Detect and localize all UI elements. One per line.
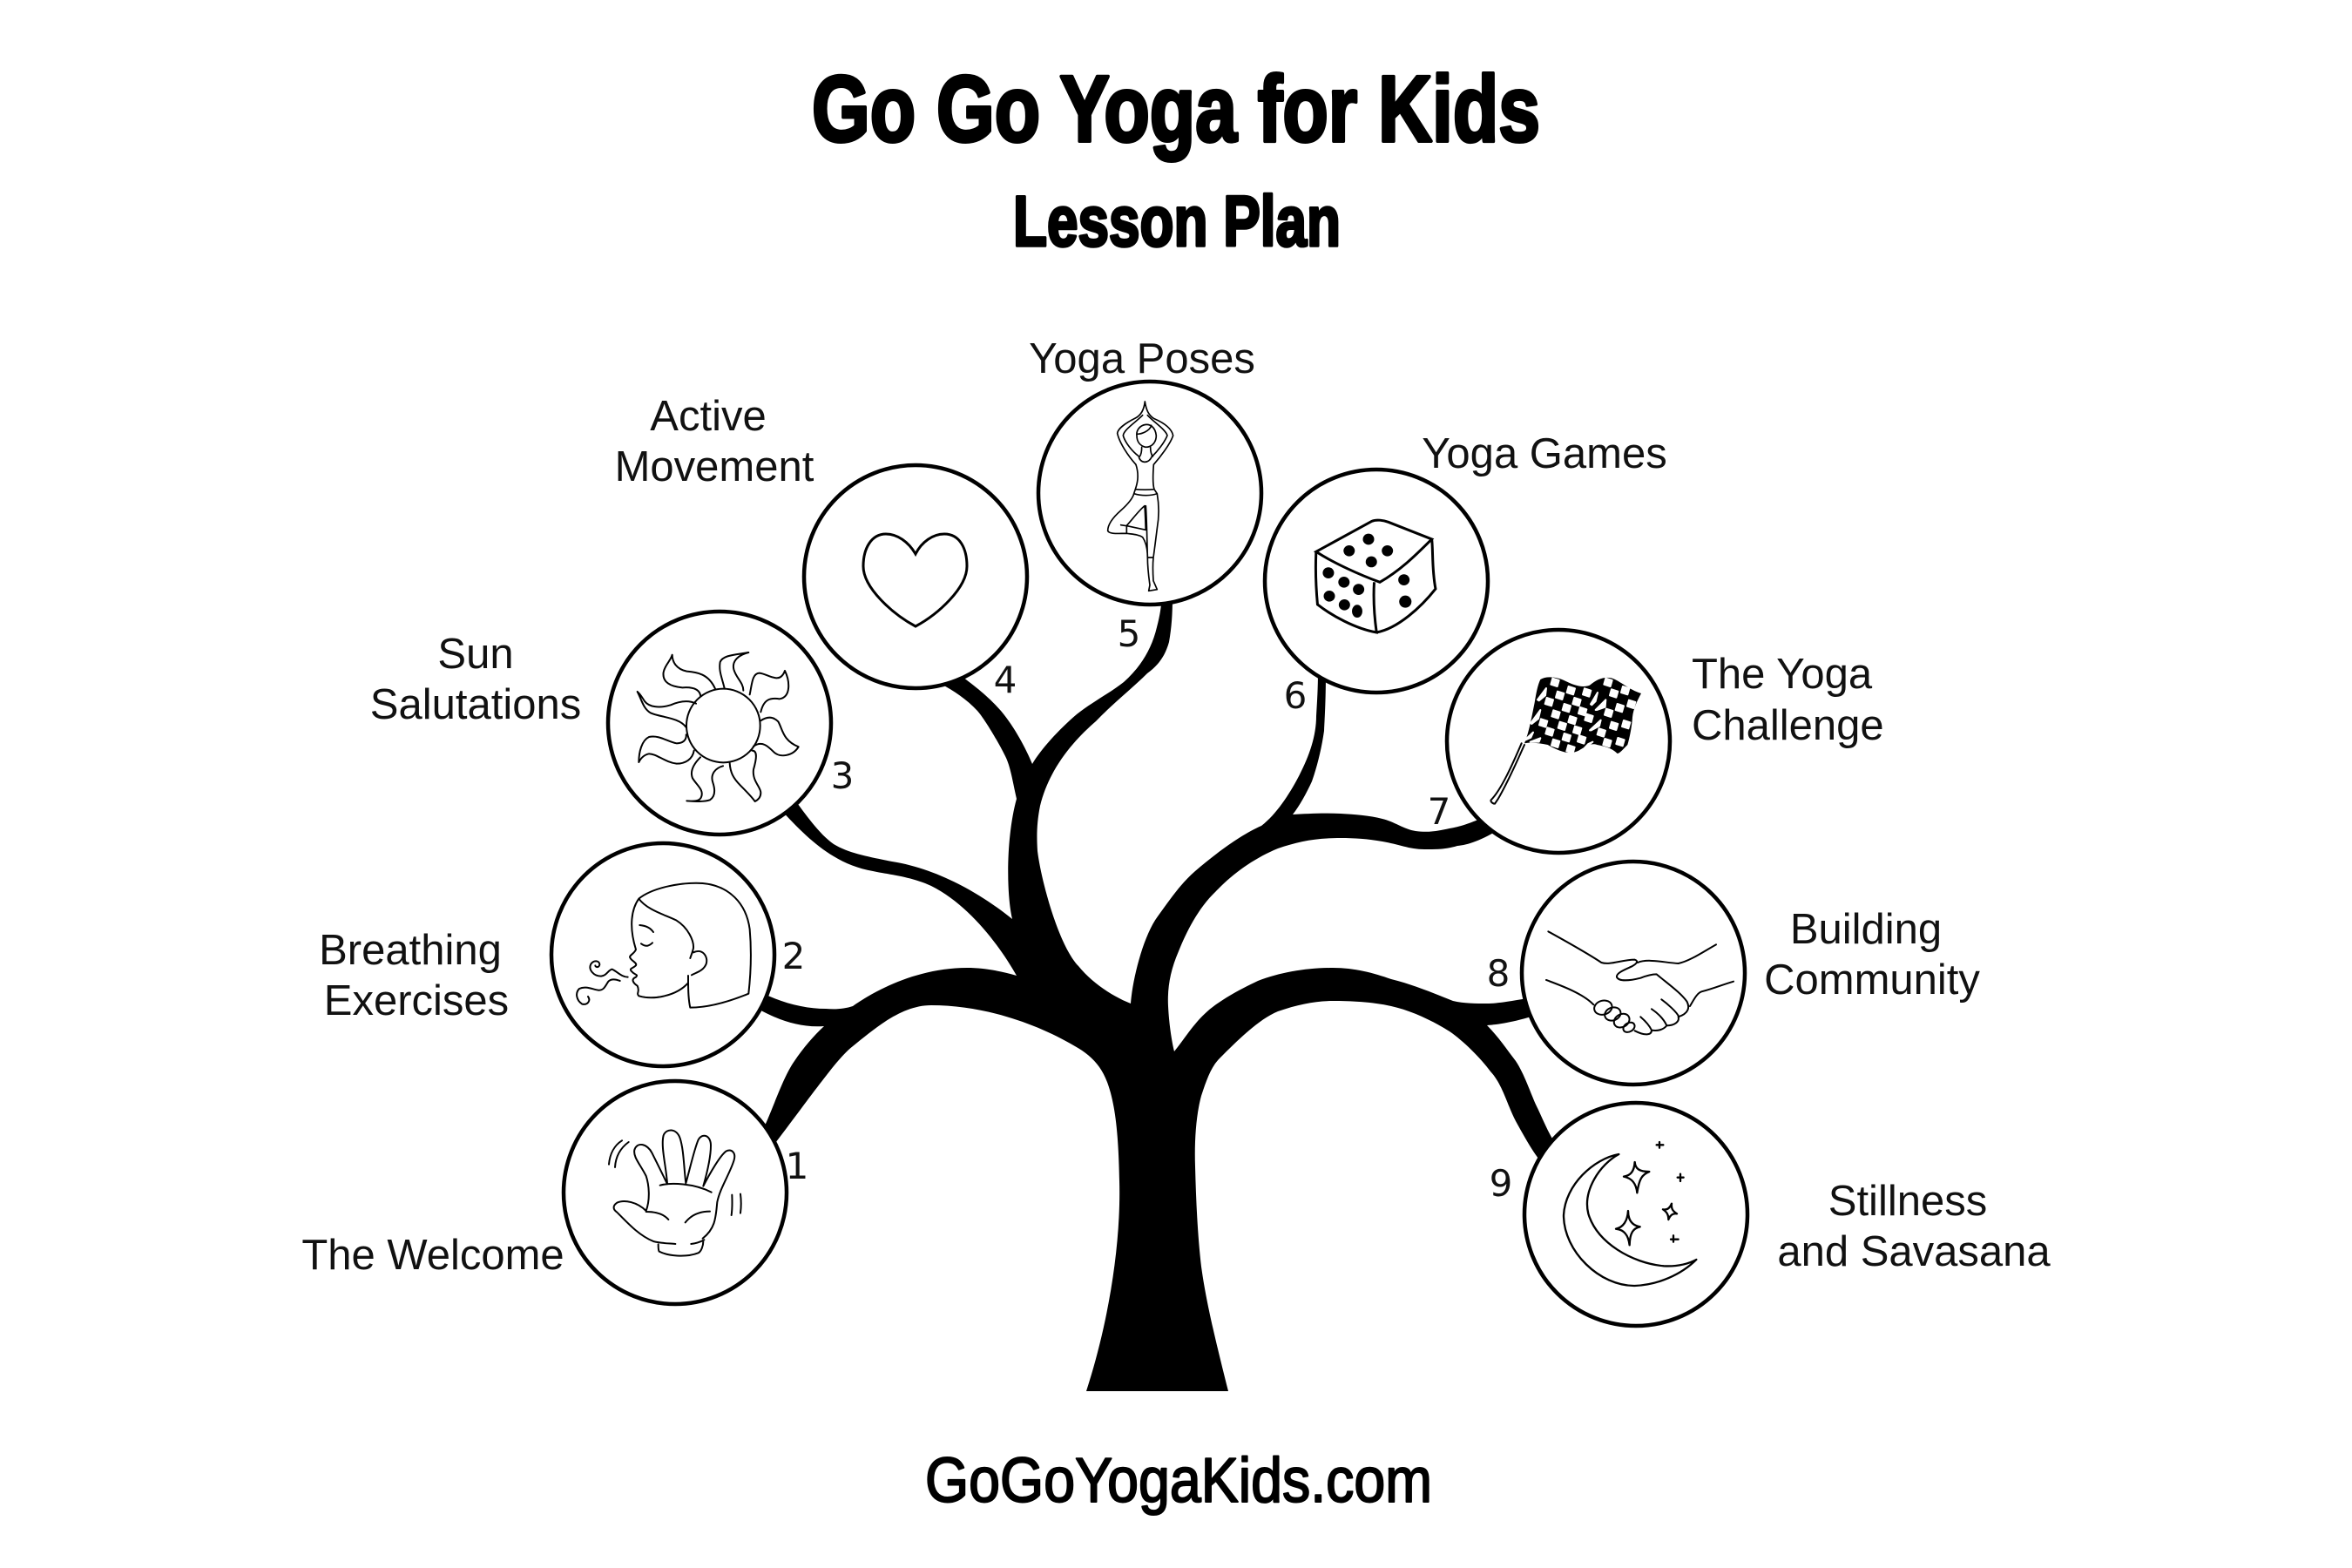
label: Yoga Poses bbox=[1029, 335, 1255, 382]
label line 2: Movement bbox=[615, 443, 814, 490]
icon: crescent moon and stars bbox=[1564, 1142, 1696, 1286]
number: 1 bbox=[786, 1145, 808, 1187]
label line 2: Salutations bbox=[370, 681, 581, 728]
label line 2: and Savasana bbox=[1777, 1228, 2051, 1275]
number: 8 bbox=[1487, 952, 1510, 995]
tree bbox=[754, 597, 1555, 1391]
panel: step 9 stillness and savasana bbox=[1490, 1103, 2051, 1326]
panel: step 7 the yoga challenge bbox=[1428, 630, 1884, 853]
label: Sun bbox=[437, 631, 514, 678]
label: Building bbox=[1790, 906, 1942, 953]
label: The Welcome bbox=[301, 1232, 564, 1279]
number: 4 bbox=[994, 659, 1017, 701]
number: 2 bbox=[782, 935, 805, 977]
label: Yoga Games bbox=[1422, 430, 1667, 477]
panel: step 3 sun salutations bbox=[370, 612, 854, 835]
number: 6 bbox=[1284, 674, 1307, 717]
number: 3 bbox=[831, 754, 854, 797]
label line 2: Community bbox=[1764, 956, 1980, 1004]
label: Active bbox=[650, 393, 767, 440]
label line 2: Exercises bbox=[324, 977, 509, 1024]
panel: step 8 building community bbox=[1487, 862, 1980, 1085]
number: 5 bbox=[1118, 612, 1140, 655]
icon: waving hand bbox=[609, 1130, 741, 1256]
icon: tree pose figure bbox=[1108, 402, 1173, 591]
icon: handshake bbox=[1546, 931, 1734, 1034]
panel: step 5 yoga poses bbox=[1029, 335, 1261, 655]
footer website: GoGoYogaKids.com bbox=[925, 1446, 1432, 1516]
panel: step 4 active movement bbox=[615, 393, 1027, 701]
panel: step 6 yoga games bbox=[1265, 430, 1667, 717]
panel: step 2 breathing exercises bbox=[319, 843, 805, 1066]
icon: heart bbox=[863, 534, 967, 626]
label: The Yoga bbox=[1692, 651, 1873, 698]
icon: dice bbox=[1315, 520, 1436, 632]
label: Breathing bbox=[319, 927, 502, 974]
panel: step 1 the welcome bbox=[301, 1081, 808, 1304]
icon: face blowing air bbox=[577, 883, 751, 1008]
number: 7 bbox=[1428, 790, 1450, 833]
number: 9 bbox=[1490, 1162, 1512, 1205]
label: Stillness bbox=[1828, 1178, 1987, 1225]
icon: checkered flag bbox=[1490, 677, 1641, 804]
title: Go Go Yoga for Kids bbox=[812, 56, 1540, 161]
icon: sun bbox=[638, 652, 799, 801]
label line 2: Challenge bbox=[1692, 702, 1884, 749]
subtitle: Lesson Plan bbox=[1013, 182, 1341, 261]
